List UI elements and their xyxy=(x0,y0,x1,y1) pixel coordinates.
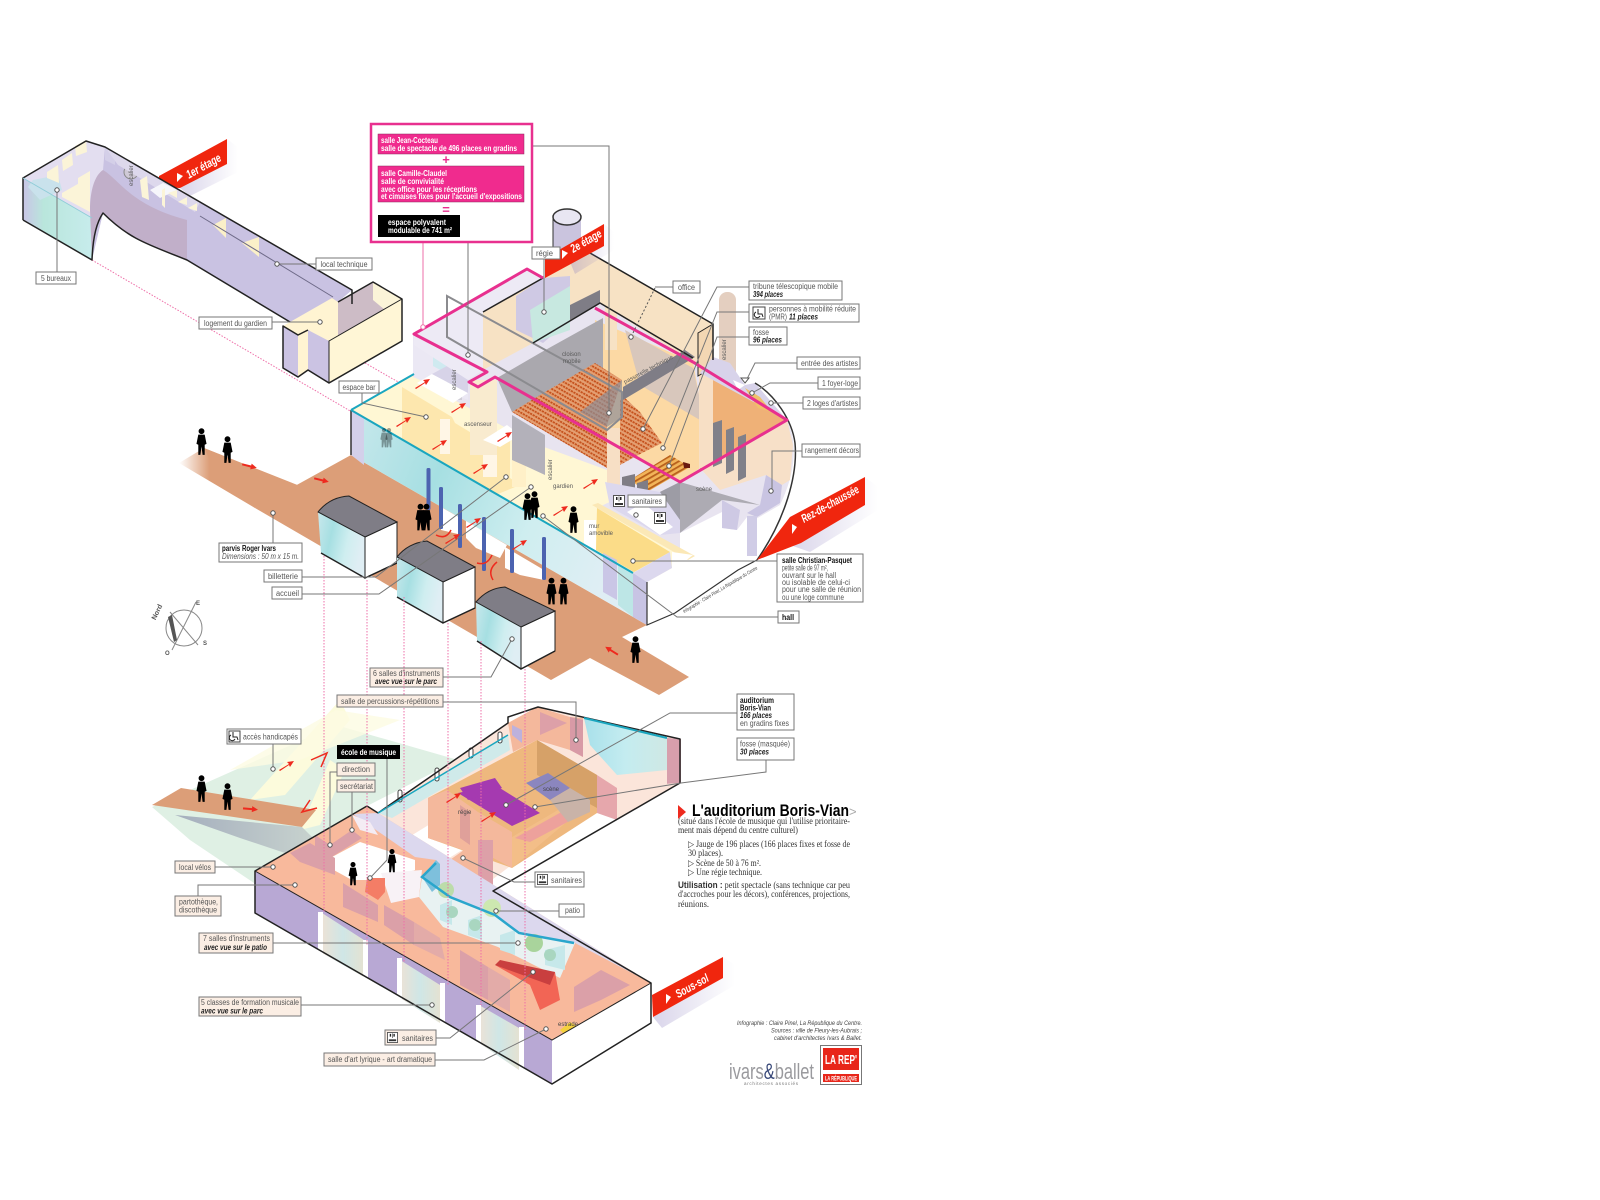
salle Jean-Cocteau: salle Jean-Cocteau xyxy=(381,136,438,145)
first-floor volume xyxy=(23,140,402,383)
office: office xyxy=(678,283,695,292)
sanitaires: sanitaires xyxy=(632,497,662,506)
text block: l'auditorium Boris-Vian xyxy=(678,801,857,909)
local vélos: local vélos xyxy=(179,863,211,872)
gardien xyxy=(283,298,338,383)
main floor xyxy=(255,806,651,1040)
room labels on plan: escalier xyxy=(548,459,554,480)
hall floor xyxy=(352,375,693,582)
auditorium: auditorium xyxy=(740,696,774,705)
room labels: sous-sol: régie xyxy=(458,810,472,816)
credits: Sources : ville de Fleury-les-Aubrais ; xyxy=(771,1028,862,1034)
rangement xyxy=(802,444,860,457)
école de musique xyxy=(337,745,400,759)
flow arrows: sous-sol xyxy=(243,753,496,822)
tribune xyxy=(749,281,842,300)
auditorium: 166 places xyxy=(740,711,772,720)
stage panels xyxy=(713,420,722,467)
ribbon: rez-de-chaussée: Rez-de-chaussée xyxy=(799,482,862,526)
room labels on plan: escalier xyxy=(722,339,728,360)
pavilion 1 xyxy=(318,496,397,578)
compass: S xyxy=(203,641,207,647)
yellow rooms xyxy=(402,387,520,494)
salle Christian-Pasquet xyxy=(777,554,863,602)
heavy outlines xyxy=(350,410,352,455)
heading: L'auditorium Boris-Vian xyxy=(692,801,849,820)
body: 30 places). xyxy=(688,848,723,858)
labels: 1er étage xyxy=(36,188,372,329)
labels: rez-de-chaussée and 2e étage xyxy=(219,247,863,687)
salle Camille-Claudel: avec office pour les réceptions xyxy=(381,185,477,194)
7 salles xyxy=(199,933,273,953)
heading: > xyxy=(849,804,857,819)
loges: 2 loges d'artistes xyxy=(807,399,858,408)
upper wing floor xyxy=(378,707,681,891)
room labels on plan: scène xyxy=(696,487,713,493)
art lyrique xyxy=(324,1053,435,1066)
tribune: tribune télescopique mobile xyxy=(753,282,838,291)
room labels: sous-sol: scène xyxy=(543,787,560,793)
compass: E xyxy=(196,601,200,607)
ribbon: rez-de-chaussée xyxy=(757,477,878,560)
salle Christian-Pasquet xyxy=(592,503,695,560)
leader lines: rez-de-chaussée and étage xyxy=(271,146,818,677)
body: ▷ Une régie technique. xyxy=(688,867,762,877)
credits: cabinet d'architectes Ivars & Ballet. xyxy=(774,1036,862,1042)
salle Camille-Claudel: et cimaises fixes pour l'accueil d'expositions xyxy=(381,192,522,201)
logo: La République du Centre: LA REP' xyxy=(825,1052,857,1067)
room labels on plan: mur xyxy=(589,524,599,530)
accueil: accueil xyxy=(276,589,299,598)
6 salles xyxy=(370,668,443,687)
lower right wall xyxy=(647,552,693,625)
5 classes xyxy=(199,997,301,1016)
labels: 1er étage: local technique xyxy=(320,260,368,269)
callout: espace polyvalent xyxy=(371,124,532,242)
7 salles: avec vue sur le patio xyxy=(204,943,267,952)
espace polyvalent: modulable de 741 m² xyxy=(388,226,452,235)
body xyxy=(678,816,850,909)
body: ▷ Jauge de 196 places (166 places fixes et fosse de xyxy=(688,839,850,849)
pavilion 2 xyxy=(397,541,475,623)
body: réunions. xyxy=(678,899,709,909)
labels: sous-sol xyxy=(175,694,794,1066)
salle Camille-Claudel: salle de convivialité xyxy=(381,177,444,186)
secrétariat xyxy=(337,780,375,792)
6 salles: avec vue sur le parc xyxy=(375,677,437,686)
room labels on plan: cloison xyxy=(562,352,581,358)
fosse masquée: fosse (masquée) xyxy=(740,740,790,748)
room labels on plan: gardien xyxy=(553,484,573,490)
white rooms xyxy=(321,842,415,880)
5 classes: avec vue sur le parc xyxy=(201,1006,263,1016)
salle Christian-Pasquet: petite salle de 97 m², xyxy=(782,564,828,572)
salle Christian-Pasquet: ouvrant sur le hall xyxy=(782,571,836,580)
silhouettes: sous-sol xyxy=(196,775,396,885)
ribbon: 1er étage xyxy=(159,139,238,196)
body: ment mais dépend du centre culturel) xyxy=(678,825,798,835)
equals: = xyxy=(442,202,450,217)
7 salles: 7 salles d'instruments xyxy=(203,934,270,943)
grey room xyxy=(497,318,603,412)
patio xyxy=(559,904,584,917)
glass facade xyxy=(351,410,647,625)
logo: ivars & ballet: architectes associés xyxy=(744,1081,799,1086)
salle Camille-Claudel xyxy=(378,166,524,202)
salle Christian-Pasquet: ou une loge commune xyxy=(782,593,844,602)
lower salmon room xyxy=(440,840,493,895)
auditorium: Boris-Vian xyxy=(740,704,771,712)
ribbon: 2e étage xyxy=(545,224,614,278)
lavender bays xyxy=(413,335,468,400)
ticket pavilions xyxy=(318,496,555,669)
body: (situé dans l'école de musique qui l'utilise prioritaire- xyxy=(678,816,850,826)
direction: direction xyxy=(342,765,370,774)
plan: sous-sol xyxy=(255,707,681,1084)
room walls xyxy=(315,830,362,858)
fosse masquée xyxy=(737,738,794,760)
accès handicapés: accès handicapés xyxy=(243,732,298,742)
body: Utilisation : petit spectacle (sans technique car peu xyxy=(678,880,850,890)
foyer xyxy=(818,377,860,389)
auditorium: en gradins fixes xyxy=(740,719,789,728)
compass: O xyxy=(165,651,170,657)
labels: 1er étage: logement du gardien xyxy=(204,319,267,328)
PMR: 11 places xyxy=(789,312,818,322)
sanitaires xyxy=(385,1030,436,1045)
body: d'accroches pour les décors), conférences, projections, xyxy=(678,889,850,899)
percussions: salle de percussions-répétitions xyxy=(341,697,439,706)
wavy mauve wall xyxy=(90,170,187,260)
auditorium xyxy=(428,740,597,868)
logo: La République du Centre: LA RÉPUBLIQUE xyxy=(825,1074,857,1082)
cylinder: chimney xyxy=(553,209,581,262)
espace polyvalent: espace polyvalent xyxy=(388,218,446,227)
room labels on plan: mobile xyxy=(563,359,581,365)
espace bar: espace bar xyxy=(342,383,376,392)
outlines xyxy=(255,707,680,1084)
fixed floor under seats xyxy=(595,320,700,482)
room labels: sous-sol xyxy=(458,787,579,1028)
patio: patio xyxy=(565,906,580,915)
parvis: Dimensions : 50 m x 15 m. xyxy=(222,552,299,561)
hall xyxy=(778,611,799,623)
lattice stair xyxy=(512,415,545,475)
accès handicapés xyxy=(227,729,301,744)
floor base xyxy=(351,300,794,582)
entrance gaps under the facade xyxy=(441,507,462,535)
ribbon: 2e étage: 2e étage xyxy=(567,226,604,256)
room labels on plan: ascenseur xyxy=(464,422,492,428)
fosse: fosse xyxy=(753,328,769,337)
PMR: personnes à mobilité réduite xyxy=(769,304,856,314)
salle Jean-Cocteau xyxy=(378,134,524,154)
partothèque: partothèque, xyxy=(179,898,218,906)
room labels on plan: escalier xyxy=(129,165,135,186)
dotted drop lines across the basement xyxy=(324,556,525,1030)
fosse: 96 places xyxy=(753,336,782,344)
rooms xyxy=(62,177,90,212)
fosse xyxy=(749,327,787,345)
percussions xyxy=(337,695,443,707)
body: ▷ Scène de 50 à 76 m². xyxy=(688,858,761,868)
credit on wall: Infographie : Claire Pinel, La République du Centre xyxy=(682,565,759,615)
sanitaires xyxy=(614,495,666,524)
second-floor back wall xyxy=(483,253,713,375)
office xyxy=(673,281,700,293)
billetterie xyxy=(264,570,302,582)
entrée: entrée des artistes xyxy=(801,359,858,368)
stage orange xyxy=(700,373,787,470)
espace polyvalent xyxy=(378,215,460,237)
end-zone floor xyxy=(700,420,793,490)
PMR: (PMR) xyxy=(769,312,787,322)
secrétariat: secrétariat xyxy=(340,782,374,791)
compass: Nord xyxy=(151,603,164,621)
salle Christian-Pasquet: salle Christian-Pasquet xyxy=(782,556,852,565)
credits xyxy=(737,1021,862,1042)
sanitaires wing: sanitaires xyxy=(551,876,582,885)
scène xyxy=(660,482,760,533)
partothèque: discothèque xyxy=(179,906,217,914)
salle Jean-Cocteau: salle de spectacle de 496 places en gradins xyxy=(381,144,517,153)
partothèque xyxy=(175,896,221,916)
hall: hall xyxy=(782,613,794,622)
credits: Infographie : Claire Pinel, La République du Centre. xyxy=(737,1021,862,1027)
entrée xyxy=(797,357,860,369)
salle Christian-Pasquet: ou isolable de celui-ci xyxy=(782,578,850,587)
tribune: 394 places xyxy=(753,290,783,299)
PMR xyxy=(749,304,859,322)
direction xyxy=(337,763,375,776)
salle Camille-Claudel: salle Camille-Claudel xyxy=(381,169,447,178)
5 classes: 5 classes de formation musicale xyxy=(201,998,299,1007)
auditorium xyxy=(737,694,794,730)
plus: + xyxy=(442,152,450,167)
régie xyxy=(532,247,560,259)
plan: rez-de-chaussée building xyxy=(351,253,795,625)
right curved end xyxy=(700,357,787,420)
room labels on plan xyxy=(129,165,728,537)
foyer: 1 foyer-loge xyxy=(822,379,858,388)
loges xyxy=(803,397,860,409)
dotted link lines between floors xyxy=(92,260,400,412)
billetterie: billetterie xyxy=(268,572,299,581)
silhouettes: rez-de-chaussée xyxy=(196,428,641,663)
6 salles: 6 salles d'instruments xyxy=(373,669,440,678)
front wall xyxy=(255,871,552,1084)
sanitaires wing xyxy=(535,872,584,887)
école de musique: école de musique xyxy=(341,748,396,757)
logo: La République du Centre xyxy=(820,1046,862,1084)
pavilion 3 xyxy=(476,587,555,669)
column: pale tower right xyxy=(719,292,736,382)
patio xyxy=(419,877,575,978)
pink outline 2e étage xyxy=(414,269,787,482)
salle Christian-Pasquet: pour une salle de réunion xyxy=(782,585,861,594)
parvis: parvis Roger Ivars xyxy=(222,544,276,553)
plan: 1er étage xyxy=(23,139,402,383)
ribbon: sous-sol xyxy=(652,957,735,1028)
ribbon: sous-sol: Sous-sol xyxy=(673,971,712,1001)
room labels on plan: passerelle technique xyxy=(623,354,675,386)
régie: régie xyxy=(536,249,554,258)
ribbon: 1er étage: 1er étage xyxy=(184,151,224,181)
labels: 1er étage: 5 bureaux xyxy=(41,274,71,283)
local vélos xyxy=(175,861,215,873)
espace bar xyxy=(339,381,379,393)
columns xyxy=(607,428,620,492)
parvis paving xyxy=(179,448,689,695)
glass columns xyxy=(426,468,546,580)
glazing columns xyxy=(398,732,502,802)
rangement: rangement décors xyxy=(805,446,859,455)
technical catwalk xyxy=(623,350,695,400)
compass xyxy=(151,601,207,657)
parvis xyxy=(219,543,302,562)
logo: ivars & ballet: ivars&ballet xyxy=(729,1059,814,1084)
fosse masquée: 30 places xyxy=(740,748,769,756)
room labels on plan: amovible xyxy=(589,531,614,537)
lawn xyxy=(152,700,458,883)
sanitaires block xyxy=(605,482,680,535)
flow arrows: rez-de-chaussée xyxy=(241,379,620,657)
room labels: sous-sol: estrade xyxy=(558,1022,579,1028)
art lyrique: salle d'art lyrique - art dramatique xyxy=(328,1055,432,1064)
seats xyxy=(512,363,622,468)
room labels on plan: escalier xyxy=(452,369,458,390)
sanitaires: sanitaires xyxy=(402,1034,433,1043)
accueil xyxy=(272,587,302,599)
